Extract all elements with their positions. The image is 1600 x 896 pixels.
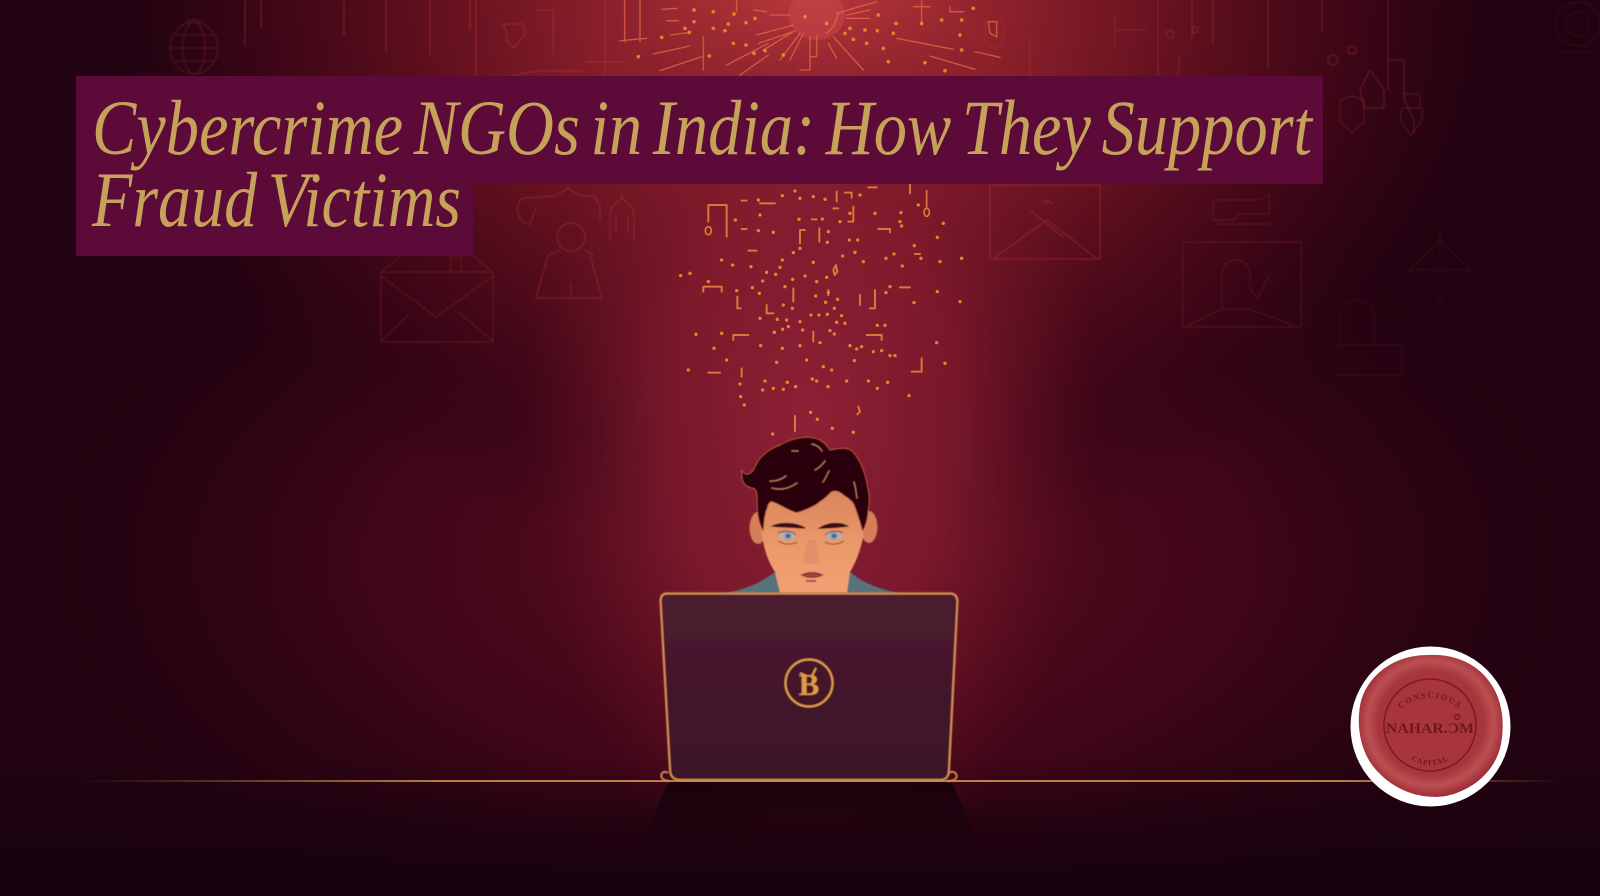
circuit lines left <box>245 0 625 110</box>
laptop <box>660 594 958 781</box>
title text line 1: Cybercrime NGOs in India: How They Support <box>92 84 1314 171</box>
circuit lines right <box>1030 0 1414 134</box>
dangling ends <box>1155 27 1356 109</box>
particle dashes <box>703 185 922 431</box>
seal wax <box>1359 655 1503 797</box>
nose <box>803 540 820 564</box>
eyebrows <box>773 524 847 528</box>
seal inner ring <box>1384 679 1476 771</box>
title banner <box>76 76 1323 256</box>
seal bottom text: CAPITAL <box>1412 756 1448 765</box>
face <box>760 486 867 593</box>
title text line 2: Fraud Victims <box>91 156 461 243</box>
person <box>724 437 900 593</box>
laptop logo: B <box>799 667 819 702</box>
icon: key <box>1213 194 1272 224</box>
floor line <box>80 780 1560 782</box>
particle dots <box>681 191 962 434</box>
burst glow <box>788 0 845 40</box>
wax seal badge <box>1350 646 1510 806</box>
title background line 2 <box>76 184 473 256</box>
icon: person and phone <box>518 188 602 298</box>
laptop lid <box>660 594 958 780</box>
icon: globe <box>170 19 218 74</box>
seal white ring <box>1350 646 1510 806</box>
top radiating burst <box>620 0 1000 75</box>
burst dots <box>638 8 973 71</box>
hair <box>742 437 870 532</box>
data particles above head <box>681 185 962 434</box>
seal top text: CONSCIOUS <box>1398 692 1461 708</box>
icon: briefcase person <box>1336 225 1475 375</box>
seal name: NAHAR.ƆM <box>1386 721 1474 737</box>
faint line icons background pattern <box>170 0 1600 375</box>
laptop hinges <box>661 772 957 781</box>
icon: tower <box>610 192 634 240</box>
laptop logo <box>786 660 832 706</box>
icon: envelope left <box>381 256 493 342</box>
icon: envelope with person <box>1183 242 1301 327</box>
particle rings <box>705 190 929 235</box>
title background line 1 <box>76 76 1323 184</box>
shadow under laptop <box>620 782 1000 896</box>
mouth <box>802 573 822 581</box>
hair highlights <box>770 444 857 498</box>
shirt <box>724 572 900 593</box>
burst rays <box>620 0 1000 75</box>
icon: shields <box>985 22 1422 135</box>
seal om dot <box>1454 714 1460 720</box>
ears <box>750 512 766 544</box>
eyes <box>778 531 844 544</box>
icon: envelope right <box>990 185 1100 259</box>
icon: target globe right <box>1556 2 1600 52</box>
